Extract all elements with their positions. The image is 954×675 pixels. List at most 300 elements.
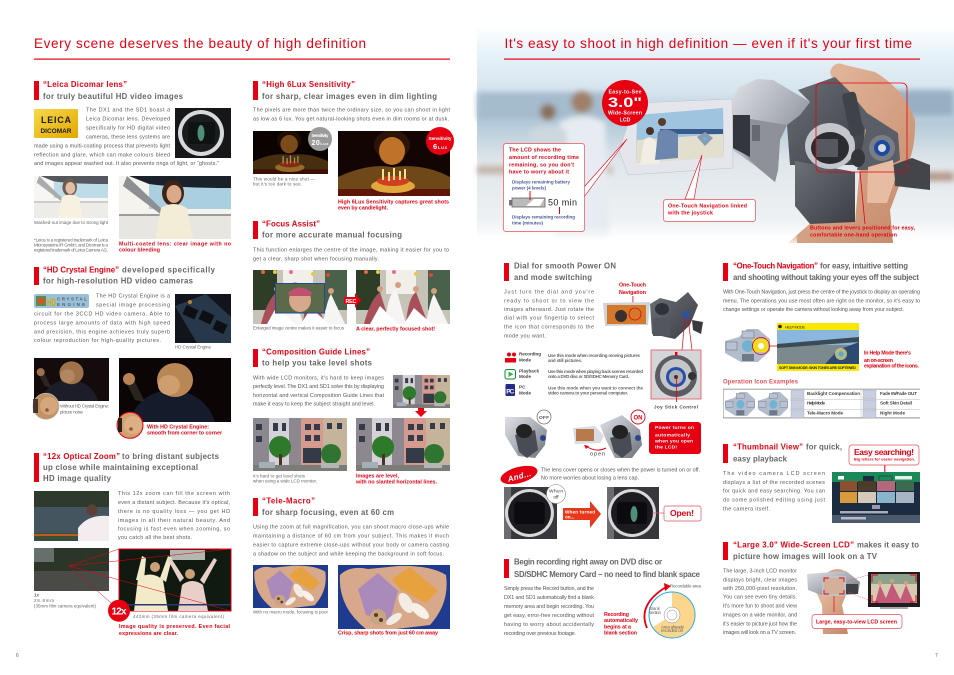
callout: LCD remaining time <box>504 139 627 232</box>
heading: 12x zoom <box>34 452 220 483</box>
caption: 1x <box>34 593 96 609</box>
body text <box>253 525 449 558</box>
callout: LCD remaining time: The LCD shows the <box>509 148 561 154</box>
inset: noise detail <box>33 393 59 419</box>
badge: When off <box>546 484 566 504</box>
body text: images in all their natural beauty. And <box>118 518 230 524</box>
callout: LCD remaining time: have to worry about it <box>509 170 569 176</box>
body text: get a clear, sharp shot when focusing manually. <box>253 257 379 263</box>
body text: ready to shoot or to view the <box>504 299 594 305</box>
heading: 12x zoom: up close while maintaining exceptional <box>43 463 198 472</box>
body text: DX1 and SD1 automatically find a blank <box>504 595 594 601</box>
icon: HD Crystal Engine logo: HD <box>47 297 56 309</box>
arrow: When turned on <box>563 501 601 528</box>
hero photo: camcorder held in hand <box>477 25 954 246</box>
photo: baby with engine <box>119 358 231 422</box>
photo: no macro <box>253 565 328 608</box>
text: recording begins <box>604 612 638 637</box>
body text: you catch all the best shots. <box>118 535 192 541</box>
inset: smooth detail <box>117 412 143 438</box>
callout: Open! <box>652 506 701 521</box>
icon: playback mode <box>505 370 516 379</box>
photo: level <box>356 418 450 471</box>
callout: Easy searching <box>849 445 919 473</box>
text: Help Mode note: an on-screen <box>864 358 893 364</box>
heading: Tele-Macro <box>253 496 394 517</box>
photo: crisp macro <box>338 565 450 629</box>
heading: One-Touch Navigation: for easy, intuitive setting <box>820 262 908 271</box>
heading: HD Crystal Engine: for high-resolution HD video cameras <box>43 277 194 286</box>
captions: but it's too dark to see. <box>253 182 302 187</box>
page number left: 6 <box>16 653 19 659</box>
callout: LCD remaining time: time (minutes) <box>512 221 543 226</box>
panel: Focus Assist <box>253 220 450 333</box>
photo: circuit board <box>175 294 231 343</box>
panel: Dial for smooth Power ON: Joy Stick Control <box>654 405 698 410</box>
heading: One-Touch Navigation <box>723 262 919 282</box>
mode list: Mode <box>519 391 531 396</box>
hand behind camera <box>788 64 915 243</box>
badge: When off: off <box>553 494 559 500</box>
callout: LCD remaining time: Displays remaining battery <box>512 180 570 185</box>
heading: 6Lux: for sharp, clear images even in dim lighting <box>262 92 437 101</box>
body text: reflection and glare, which can make colours bleed <box>34 152 170 158</box>
photo: camcorder with dial <box>603 292 703 339</box>
mode list: Mode <box>519 374 531 379</box>
body text: process large amounts of data with high speed <box>34 320 170 326</box>
text: recording begins: begins at a <box>604 625 631 631</box>
body text <box>34 294 170 344</box>
captions: with no slanted horizontal lines. <box>355 479 438 485</box>
captions: A clear, perfectly focused shot! <box>356 327 435 333</box>
badge: And... <box>499 462 539 488</box>
body text: images afterward. Just rotate the <box>504 307 594 313</box>
callout: One-Touch Navigation link: One-Touch Navigation linked <box>668 204 747 210</box>
body text: as low as 6 lux. You get natural-looking shots even in dim rooms or at dusk. <box>253 117 449 123</box>
heading: Operation Icon Examples: Operation Icon Examples <box>723 380 799 386</box>
heading: Leica Dicomar: “Leica Dicomar lens” <box>43 80 127 89</box>
captions <box>253 177 449 212</box>
icon: HD Crystal Engine logo: ENGINE <box>57 302 85 307</box>
text: recording begins: Recording <box>604 612 629 618</box>
screen: thumbnail view <box>832 472 920 523</box>
label: One-Touch Navigation: Navigation <box>619 290 646 296</box>
body text: mode you want. <box>504 334 546 340</box>
mode list: Use this mode when recording moving pictures <box>548 353 640 358</box>
heading: Focus Assist: “Focus Assist” <box>262 220 320 229</box>
heading: Dial: Dial for smooth Power ON <box>514 262 616 271</box>
photo: enlarged centre <box>253 270 347 324</box>
photo: focused <box>356 270 450 324</box>
badge: OFF <box>537 410 551 424</box>
heading: Large LCD: “Large 3.0" Wide-Screen LCD” <box>733 541 854 550</box>
photo: camcorder open <box>573 415 642 458</box>
body text <box>253 248 449 263</box>
photo: slanted <box>253 418 347 471</box>
callout: One-Touch Navigation link <box>664 155 756 222</box>
heading: Composition <box>253 348 373 368</box>
body text: focusing is fast even when zooming, so <box>118 526 230 532</box>
panel: Tele-Macro <box>253 496 450 636</box>
captions: With no macro mode, focusing is poor <box>253 610 328 615</box>
arrow: open: open <box>590 452 605 458</box>
chart: disc diagram <box>644 583 701 638</box>
body text: a shadow on the subject and while keeping the background in soft focus. <box>253 552 444 558</box>
panel: Begin recording <box>504 558 701 638</box>
heading: Composition: “Composition Guide Lines” <box>262 348 370 357</box>
camera controls and dial <box>840 84 900 170</box>
mode list: Use this mode when playing back scenes recorded <box>548 369 643 374</box>
captions: even by candlelight. <box>338 206 389 212</box>
callout: buttons and levers <box>810 83 916 239</box>
panel: Large 3.0 inch LCD <box>722 541 920 636</box>
photo: 6 lux <box>338 130 450 196</box>
body text <box>253 376 384 408</box>
badge: Easy-to-See 3.0 inch: 3.0" <box>608 94 642 110</box>
icon: HD Crystal Engine logo: CRYSTAL <box>57 296 87 302</box>
icon: recording mode <box>505 352 516 362</box>
body text: This function enlarges the centre of the image, making it easier for you to <box>253 248 449 254</box>
screen: Help Mode: SOFT SKIN MODE: SKIN TONES ARE SOFTENED <box>779 366 856 370</box>
heading: 12x zoom: HD image quality <box>43 474 112 483</box>
heading: Tele-Macro: for sharp focusing, even at 60 cm <box>262 508 394 517</box>
arrow: REC: REC <box>346 299 357 305</box>
body text: memory area and begin recording. You <box>504 604 594 610</box>
badge: ON <box>631 410 645 424</box>
body text <box>723 471 826 512</box>
arrow: When turned on: When turned <box>565 510 595 515</box>
heading: Begin recording: SD/SDHC Memory Card – no need to find blank space <box>514 570 701 579</box>
heading: Dial <box>504 262 616 282</box>
chart: disc diagram: section <box>649 610 661 615</box>
captions: colour bleeding <box>119 248 160 254</box>
text: lens cover: No more worries about losing a lens cap. <box>541 476 639 482</box>
title: left page: Every scene deserves the beauty of high definition <box>34 36 366 51</box>
body text <box>723 290 920 313</box>
body text: special image processing <box>96 303 170 309</box>
badge: Easy-to-See 3.0 inch: Easy-to-See <box>608 89 642 95</box>
photo: baby without engine <box>34 358 109 401</box>
body text: easier to capture extreme close-ups without your body or camera casting <box>253 543 449 549</box>
panel: One-Touch Navigation <box>723 262 920 418</box>
panel: 12x Optical Zoom <box>34 452 231 637</box>
table: operation icons: Backlight Compensation <box>807 391 860 396</box>
icon: battery <box>509 191 545 207</box>
badge: Easy-to-See 3.0 inch: Wide-Screen <box>608 111 642 117</box>
heading: HD Crystal Engine: “HD Crystal Engine” <box>43 266 119 275</box>
icon: Leica Dicomar logo <box>34 109 78 138</box>
captions <box>119 614 231 637</box>
mode list: Recording <box>519 352 541 357</box>
body text <box>504 290 594 340</box>
body text: with 250,000-pixel resolution. <box>722 586 797 592</box>
body text: do some polished editing using just <box>723 498 826 504</box>
body text: the camera itself. <box>723 506 770 512</box>
callout: Open!: Open! <box>670 508 694 518</box>
body text: and images appear washed out. It also prevents rings of light, or “ghosts.” <box>34 161 219 167</box>
caption: 1x: (35mm film camera equivalent) <box>34 604 96 609</box>
callout: power turns on: the LCD! <box>655 444 677 450</box>
heading: Large LCD: makes it easy to <box>857 541 919 550</box>
callout: power turns on: Power turns on <box>655 425 694 431</box>
heading: Dial: and mode switching <box>514 273 592 282</box>
heading: Begin recording <box>504 558 701 579</box>
captions: Multi-coated lens: clear image with no <box>119 242 232 248</box>
captions: when using a wide LCD monitor. <box>253 479 317 484</box>
photo: guide lines on screen <box>393 375 450 408</box>
title: right page: It's easy to shoot in high definition — even if it's your first time <box>504 36 912 51</box>
heading: Large LCD: picture how images will look on a TV <box>733 552 878 561</box>
captions <box>253 325 435 333</box>
heading: Thumbnail View: easy playback <box>733 455 788 464</box>
body text <box>118 491 230 541</box>
callout: LCD remaining time: power (4 levels) <box>512 186 546 191</box>
captions <box>253 610 438 636</box>
body text: You can see even tiny details. <box>723 595 797 601</box>
body text: With One-Touch Navigation, just press the centre of the joystick to display an operating <box>723 290 920 296</box>
table: operation icons <box>723 388 920 418</box>
captions: It's hard to get level shots <box>253 474 306 479</box>
body text <box>34 108 219 167</box>
badge: OFF: OFF <box>539 415 549 421</box>
chart: disc diagram: Blank <box>649 606 661 611</box>
arrow: down <box>415 408 427 417</box>
body text: for quick and easy searching. You can <box>723 489 825 495</box>
mode list <box>505 352 643 396</box>
photo: 20 lux <box>253 130 328 174</box>
captions: registered trademark of Leica Camera AG. <box>34 248 108 252</box>
callout: power turns on <box>649 422 701 454</box>
badge: ON: ON <box>634 416 642 422</box>
photo: 12x telephoto shot <box>119 549 231 611</box>
camcorder body <box>732 77 866 224</box>
chart: disc diagram: recorded on <box>661 628 683 633</box>
heading: 6Lux: “High 6Lux Sensitivity” <box>262 80 355 89</box>
heading: Focus Assist: for more accurate manual focusing <box>262 231 402 240</box>
mode list: and still pictures. <box>548 358 582 363</box>
body text: Leica Dicomar lens. Developed <box>86 117 170 123</box>
text: Help Mode note: explanation of the icons. <box>864 364 920 370</box>
callout: LCD remaining time: Displays remaining recording <box>512 215 575 220</box>
badge: 6 lux: 6Lux <box>433 142 447 151</box>
heading: Thumbnail View <box>723 443 842 464</box>
body text: This 12x zoom can fill the screen with <box>118 491 230 497</box>
photo: joystick dial <box>651 318 701 402</box>
panel: HD Crystal Engine: HD Crystal Engine <box>175 345 211 350</box>
heading: 12x zoom: to bring distant subjects <box>122 452 220 461</box>
heading: Thumbnail View: for quick, <box>806 443 842 452</box>
text: lens cover: The lens cover opens or closes when the power is turned on or off. <box>541 468 700 474</box>
mode list: PC <box>519 384 526 389</box>
badge: 12x: 12x <box>112 606 127 618</box>
badge: 20 lux <box>308 127 332 151</box>
body text: images on a wide monitor, and <box>723 613 797 619</box>
panel: High 6Lux Sensitivity <box>253 80 454 212</box>
callout: Large, easy-to-view: Large, easy-to-view LCD screen <box>816 620 897 626</box>
body text <box>253 108 450 123</box>
body text: the icon that corresponds to the <box>504 325 594 331</box>
mode list: Mode <box>519 358 531 363</box>
captions: Washed-out image due to strong light <box>34 220 109 225</box>
screen: Help Mode <box>777 323 859 371</box>
body text: Just turn the dial and you're <box>504 290 594 296</box>
body text: The HD Crystal Engine is a <box>96 294 170 300</box>
heading: Begin recording: Begin recording right away on DVD disc or <box>514 558 662 567</box>
heading: 12x zoom: “12x Optical Zoom” <box>43 452 120 461</box>
badge: When off: When <box>549 488 563 494</box>
callout: power turns on: automatically <box>655 433 690 439</box>
text: Help Mode note: In Help Mode there's <box>864 351 911 357</box>
mode list: onto a DVD disc or SD/SDHC Memory Card. <box>548 374 629 379</box>
label: One-Touch Navigation <box>619 283 646 312</box>
captions: Image quality is preserved. Even facial <box>119 624 231 630</box>
captions: Enlarged image centre makes it easier to focus <box>253 325 345 330</box>
icon: Leica Dicomar logo: DICOMAR <box>40 128 72 135</box>
captions: Without HD Crystal Engine: <box>60 404 109 409</box>
mode list: video camera to your personal computer. <box>548 391 628 396</box>
captions <box>60 404 222 437</box>
body text: having to worry about accidentally <box>504 622 594 628</box>
photo: TV <box>848 572 920 609</box>
heading: Thumbnail View: “Thumbnail View” <box>733 443 803 452</box>
icon: Leica Dicomar logo: LEICA <box>41 115 72 125</box>
badge: 20 lux: 20Lux <box>312 140 329 147</box>
photo: lens cover closed <box>504 487 557 539</box>
icon: HD Crystal Engine logo <box>34 294 89 309</box>
icon: PC mode: PC <box>506 388 514 396</box>
photo: man filming at river <box>34 491 109 541</box>
body text: it's easier to picture just how the <box>723 622 797 628</box>
body text: make it easy to keep the subject straight and level. <box>253 402 375 408</box>
body text: recording over previous footage. <box>504 631 576 637</box>
body text: there is no quality loss — you get HD <box>118 509 230 515</box>
body text <box>722 568 797 636</box>
panel: Dial for smooth Power ON <box>499 262 703 539</box>
body text: displays bright, clear images <box>723 577 797 583</box>
badge: 20 lux: Sensitivity <box>312 133 329 138</box>
heading: HD Crystal Engine: developed specifically <box>122 266 216 275</box>
panel: Leica Dicomar lens <box>34 80 232 254</box>
body text: With wide LCD monitors, it's hard to keep images <box>253 376 384 382</box>
body text: images will look on a TV screen. <box>723 630 796 636</box>
photo: washed-out image <box>34 176 108 218</box>
screen: Help Mode: HELP MODE <box>785 325 805 329</box>
body text: horizontal and vertical Composition Guide Lines that <box>253 393 384 399</box>
callout: buttons and levers: comfortable one-hand operation <box>810 233 897 239</box>
heading: Focus Assist <box>253 220 402 240</box>
body text: menu. The operations you use most often are right on the monitor, so it's easy to <box>723 299 920 305</box>
caption: 1x: 28.8mm <box>34 598 54 603</box>
caption: 1x: 1x <box>34 593 40 598</box>
body text: maintaining a distance of 60 cm from your subject. This makes it much <box>253 534 449 540</box>
table: operation icons: Help Mode <box>807 401 825 406</box>
heading: Composition: to help you take level shots <box>262 359 373 368</box>
body text: The video camera LCD screen <box>723 471 825 477</box>
page number right: 7 <box>935 653 938 659</box>
body text: even a distant subject. Because it's optical, <box>118 500 230 506</box>
callout: Easy searching: Easy searching! <box>854 447 914 457</box>
panel: HD Crystal Engine <box>33 266 231 438</box>
body text: The DX1 and the SD1 boast a <box>86 108 170 114</box>
body text <box>504 586 594 637</box>
captions: Images are level, <box>356 473 400 479</box>
captions: 442mm (35mm film camera equivalent) <box>133 614 224 619</box>
callout: Easy searching: Big letters for easier navigation. <box>854 458 915 462</box>
captions: *Leica is a registered trademark of Leica <box>34 238 108 242</box>
callout: LCD remaining time: 50 min <box>548 198 577 208</box>
body text: specifically for HD digital video <box>86 126 170 132</box>
body text: The pixels are more than twice the ordinary size, so you can shoot in light <box>253 108 450 114</box>
text: lens cover <box>541 468 700 482</box>
heading: 6Lux <box>253 80 437 101</box>
table: operation icons: Fade IN/Fade OUT <box>880 391 917 396</box>
callout: LCD remaining time: remaining, so you don't <box>509 163 574 169</box>
body text: made using a multi-coating process that prevents light <box>34 144 170 150</box>
body text: perfectly level. The DX1 and SD1 solve this by displaying <box>253 384 384 390</box>
callout: power turns on: when you open <box>654 439 693 445</box>
body text: and precision, this engine achieves truly superb <box>34 329 170 335</box>
heading: Tele-Macro: “Tele-Macro” <box>262 496 315 505</box>
body text: colour reproduction for high-quality pictures. <box>34 338 161 344</box>
heading: One-Touch Navigation: and shooting without taking your eyes off the subject <box>733 273 919 282</box>
photo: clear image <box>119 176 231 239</box>
badge: 6 lux <box>426 127 454 155</box>
photo: 1x wide shot <box>34 548 109 591</box>
captions: Microsystems IR GmbH, and Dicomar is a <box>34 242 108 248</box>
body text: The large, 3-inch LCD monitor <box>723 568 797 574</box>
chart: disc diagram: Area already <box>661 624 685 630</box>
photo: lens cover open <box>607 487 659 539</box>
arrow: When turned on: on... <box>565 515 574 520</box>
icon: navigation cluster <box>725 329 783 362</box>
callout: One-Touch Navigation link: with the joystick <box>667 211 713 217</box>
callout: buttons and levers: Buttons and levers positioned for easy, <box>810 225 916 231</box>
callout: LCD remaining time: amount of recording time <box>509 155 579 161</box>
body text: get easy, error-free recording without <box>504 613 594 619</box>
body text: displays a list of the recorded scenes <box>723 480 825 486</box>
body text: dial with your fingertip to select <box>504 316 594 322</box>
heading: HD Crystal Engine <box>34 266 216 286</box>
thumb <box>867 160 895 203</box>
captions: With HD Crystal Engine: <box>147 425 209 431</box>
zoom connector lines <box>69 549 231 611</box>
badge: 6 lux: Sensitivity <box>428 136 452 142</box>
badge: And...: And... <box>506 469 532 484</box>
LCD panel <box>619 99 733 175</box>
body text: It's more fun to shoot and view <box>723 603 797 609</box>
body text: Simply press the Record button, and the <box>504 586 594 592</box>
photo: camera in hand <box>807 569 860 634</box>
mode list: Use this mode when you want to connect the <box>548 386 643 391</box>
body text: circuit for the 3CCD HD video camera. Able to <box>34 311 170 317</box>
body text: Using the zoom at full magnification, you can shoot macro close-ups while <box>253 525 449 531</box>
heading: Large LCD <box>723 541 919 561</box>
text: Help Mode note <box>864 351 920 370</box>
captions: picture noise <box>60 410 83 415</box>
photo: camcorder closed <box>505 417 547 458</box>
table: operation icons: Soft Skin Detail <box>880 401 912 406</box>
badge: Easy-to-See 3.0 inch: LCD <box>620 118 631 124</box>
captions: Crisp, sharp shots from just 60 cm away <box>338 630 438 636</box>
chart: disc diagram: Recordable area <box>670 584 701 589</box>
label: One-Touch Navigation: One-Touch <box>619 283 646 289</box>
body text: cameras, these lens systems are <box>86 135 170 141</box>
captions <box>34 220 232 254</box>
badge: Easy-to-See 3.0 inch <box>602 80 648 126</box>
captions: expressions are clear. <box>119 631 179 637</box>
callout: Large, easy-to-view <box>812 614 902 628</box>
table: operation icons: Tele-Macro Mode <box>807 411 843 416</box>
